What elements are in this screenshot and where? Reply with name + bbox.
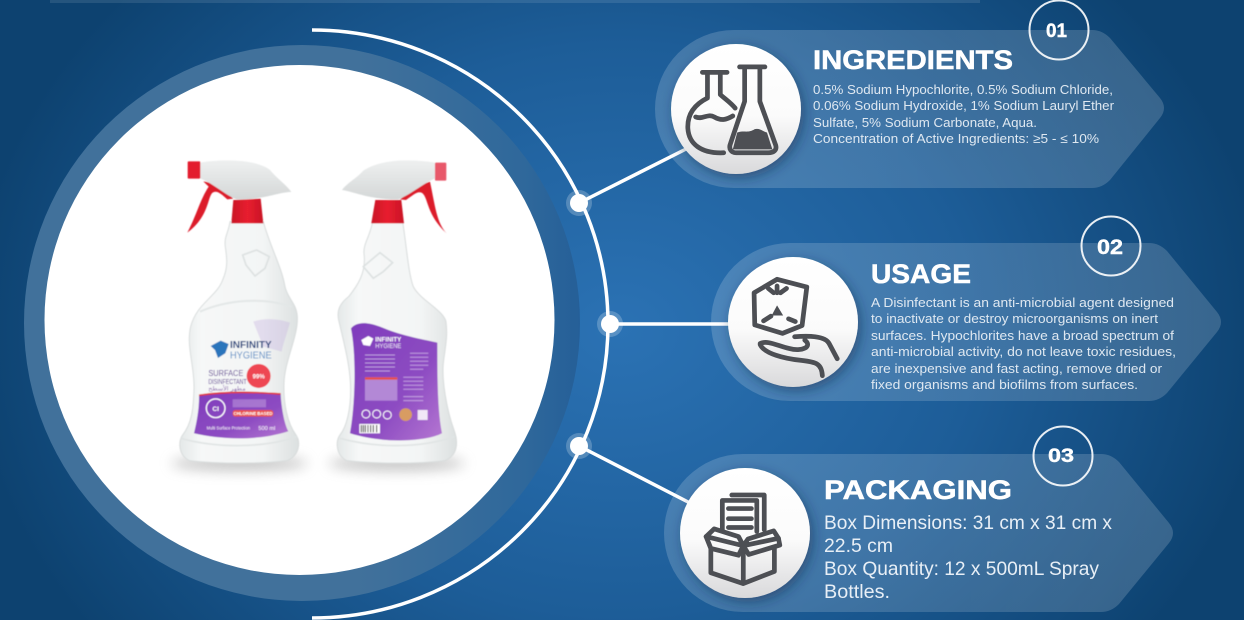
heading: INGREDIENTS (813, 45, 1013, 75)
product: front bottle: CHLORINE BASED (234, 411, 272, 416)
text block: are inexpensive and fast acting, remove dried or (871, 361, 1163, 376)
text block: A Disinfectant is an anti-microbial agent designed (871, 295, 1174, 310)
red cap (371, 200, 404, 223)
number badge (1082, 216, 1140, 276)
red trigger (187, 181, 233, 233)
text block: Box Quantity: 12 x 500mL Spray (824, 558, 1099, 580)
text block: Box Dimensions: 31 cm x 31 cm x (824, 512, 1112, 534)
text block (824, 512, 1112, 603)
text block: to inactivate or destroy microorganisms on inert (871, 311, 1158, 326)
text block (871, 295, 1176, 392)
product: front bottle: INFINITY (230, 340, 272, 351)
text block: surfaces. Hypochlorites have a broad spectrum of (871, 328, 1174, 343)
product: back bottle (328, 160, 465, 471)
text block: fixed organisms and biofilms from surfaces. (871, 377, 1138, 392)
product circle (44, 65, 554, 575)
number badge (1030, 0, 1088, 60)
emboss (243, 250, 269, 276)
red trigger (400, 182, 447, 233)
text block: Bottles. (824, 581, 890, 603)
product: front bottle: Cl (212, 406, 219, 413)
text block: 0.06% Sodium Hydroxide, 1% Sodium Lauryl Ether (813, 98, 1115, 113)
product: front bottle: مطهر الأسطح (208, 384, 246, 393)
text block: 0.5% Sodium Hypochlorite, 0.5% Sodium Chloride, (813, 82, 1113, 97)
product: front bottle: DISINFECTANT (208, 379, 247, 386)
product: front bottle: 500 ml (258, 426, 275, 432)
number badge: 01 (1046, 21, 1067, 42)
product: front bottle: 99% (253, 374, 265, 380)
icon: cube in hand (728, 257, 858, 387)
product: front bottle: HYGIENE (230, 350, 272, 361)
icon: flasks (671, 44, 801, 174)
panel: packaging (664, 426, 1173, 612)
text block: 22.5 cm (824, 535, 893, 557)
brand logo (211, 341, 229, 358)
text block: anti-microbial activity, do not leave toxic residues, (871, 344, 1176, 359)
text block (813, 82, 1115, 146)
bottle body (180, 222, 299, 463)
product: front bottle (171, 160, 308, 471)
heading: PACKAGING (824, 475, 1012, 505)
text block: Sulfate, 5% Sodium Carbonate, Aqua. (813, 115, 1037, 130)
product: front bottle: Multi Surface Protection (207, 425, 250, 430)
product circle ring (24, 45, 580, 601)
panel: ingredients (655, 0, 1164, 188)
heading: USAGE (871, 259, 971, 289)
red cap (231, 199, 263, 223)
label band (194, 392, 288, 438)
trigger head (342, 160, 435, 199)
emboss (363, 253, 393, 278)
number badge (1034, 426, 1092, 486)
text block: Concentration of Active Ingredients: ≥5 - ≤ 10% (813, 131, 1099, 146)
bottle body (337, 222, 457, 463)
number badge: 02 (1097, 236, 1123, 259)
back label text: INFINITY (375, 336, 402, 343)
trigger head (200, 160, 291, 199)
product: back bottle: HYGIENE (375, 343, 402, 350)
number badge: 03 (1048, 446, 1074, 467)
purple back label (350, 323, 442, 440)
product: front bottle: SURFACE (208, 368, 244, 378)
icon: open box (680, 468, 810, 598)
arc with connectors (312, 30, 730, 618)
panel: usage (711, 216, 1221, 401)
